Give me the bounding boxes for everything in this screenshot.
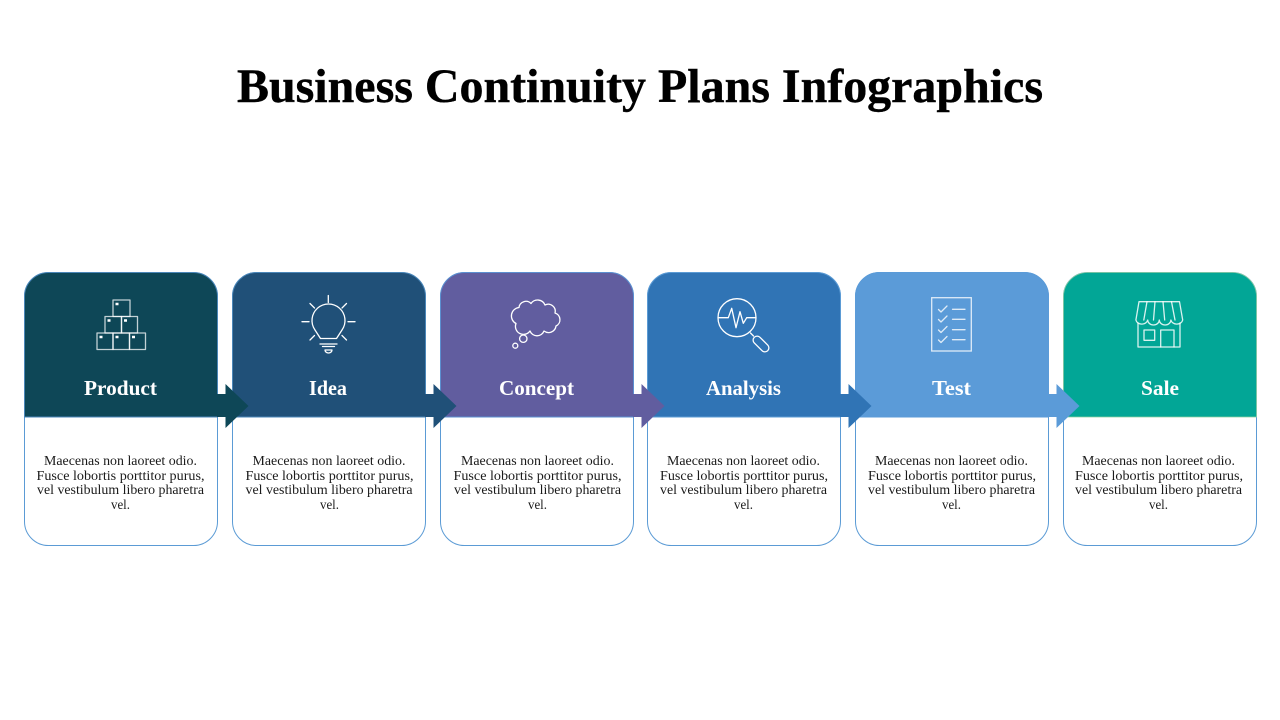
panel: product bbox=[24, 272, 218, 546]
concept body card bbox=[440, 272, 634, 546]
analysis body card bbox=[648, 272, 840, 546]
product header bbox=[24, 272, 218, 417]
sale text: vel vestibulum libero pharetra bbox=[1075, 483, 1243, 498]
idea text: vel vestibulum libero pharetra bbox=[246, 483, 413, 498]
idea text: vel. bbox=[320, 498, 339, 513]
title: Business Continuity Plans Infographics bbox=[237, 60, 1043, 113]
arrow: idea to concept bbox=[425, 384, 456, 428]
concept heading: Concept bbox=[499, 376, 574, 400]
analysis text: Fusce lobortis porttitor purus, bbox=[660, 469, 828, 484]
icon: thought cloud bbox=[511, 300, 560, 348]
sale text: Fusce lobortis porttitor purus, bbox=[1075, 469, 1243, 484]
idea header bbox=[232, 272, 426, 417]
icon: magnifier with pulse bbox=[718, 299, 771, 354]
analysis text: Maecenas non laoreet odio. bbox=[667, 454, 820, 469]
concept header bbox=[440, 272, 634, 417]
test text: vel vestibulum libero pharetra bbox=[868, 483, 1036, 498]
analysis header bbox=[648, 272, 841, 417]
concept text: Maecenas non laoreet odio. bbox=[461, 454, 614, 469]
test text: vel. bbox=[942, 498, 961, 513]
product body card bbox=[24, 272, 218, 546]
arrow: test to sale bbox=[1048, 384, 1080, 428]
analysis text: vel. bbox=[734, 498, 753, 513]
icon: storefront bbox=[1136, 302, 1183, 347]
test header bbox=[856, 272, 1048, 417]
icon: light bulb bbox=[302, 296, 355, 353]
test heading: Test bbox=[932, 376, 971, 400]
arrow: product to idea bbox=[217, 384, 248, 428]
test text: Fusce lobortis porttitor purus, bbox=[868, 469, 1036, 484]
arrow: analysis to test bbox=[840, 384, 872, 428]
sale text: vel. bbox=[1149, 498, 1168, 513]
test body card bbox=[856, 272, 1048, 546]
product text: Maecenas non laoreet odio. bbox=[44, 454, 197, 469]
product text: Fusce lobortis porttitor purus, bbox=[36, 469, 204, 484]
idea text: Fusce lobortis porttitor purus, bbox=[246, 469, 414, 484]
analysis text: vel vestibulum libero pharetra bbox=[660, 483, 828, 498]
idea text: Maecenas non laoreet odio. bbox=[252, 454, 406, 469]
idea heading: Idea bbox=[309, 376, 347, 400]
arrow: concept to analysis bbox=[633, 384, 664, 428]
panel: test bbox=[856, 272, 1048, 546]
panel: sale bbox=[1064, 272, 1256, 546]
concept text: vel vestibulum libero pharetra bbox=[454, 483, 622, 498]
panel: idea bbox=[232, 272, 426, 546]
analysis heading: Analysis bbox=[706, 376, 781, 400]
product heading: Product bbox=[84, 376, 157, 400]
sale body card bbox=[1064, 272, 1256, 546]
panel: analysis bbox=[648, 272, 841, 546]
icon: checklist bbox=[932, 298, 971, 351]
concept text: Fusce lobortis porttitor purus, bbox=[454, 469, 622, 484]
sale header bbox=[1064, 272, 1256, 417]
product text: vel. bbox=[111, 498, 130, 513]
icon: stacked boxes bbox=[97, 300, 146, 350]
idea body card bbox=[232, 272, 426, 546]
sale heading: Sale bbox=[1141, 376, 1179, 400]
product text: vel vestibulum libero pharetra bbox=[37, 483, 205, 498]
test text: Maecenas non laoreet odio. bbox=[875, 454, 1028, 469]
concept text: vel. bbox=[528, 498, 547, 513]
panel: concept bbox=[440, 272, 634, 546]
sale text: Maecenas non laoreet odio. bbox=[1082, 454, 1235, 469]
